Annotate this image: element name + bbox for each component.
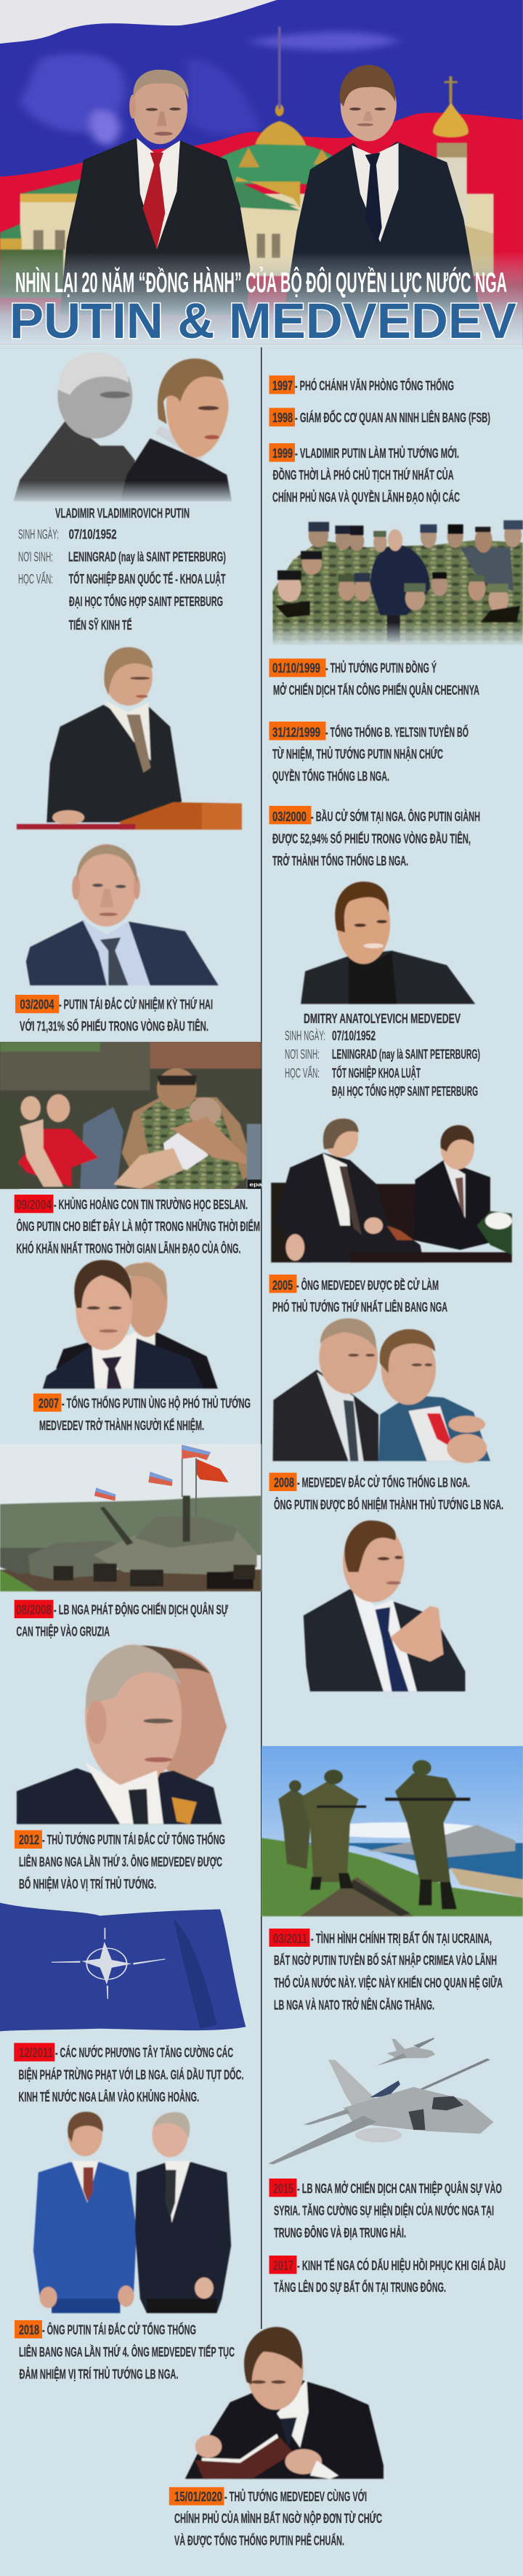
- photo: Crimea soldiers: [262, 1746, 523, 1916]
- profile: Putin: [18, 506, 226, 633]
- photo: tanks with flags: [0, 1444, 261, 1591]
- photo: Putin at podium: [17, 647, 242, 830]
- event: 2012: LIÊN BANG NGA LẦN THỨ 3. ÔNG MEDVEDEV ĐƯỢC: [19, 1854, 222, 1870]
- profile: Putin: TIẾN SỸ KINH TẾ: [69, 618, 132, 633]
- photo: Beslan hostage crisis: epa: [249, 1182, 262, 1187]
- event: 2015: [269, 2179, 502, 2240]
- Medvedev: [283, 65, 480, 315]
- photo: Medvedev reading book: [185, 2327, 384, 2479]
- profile: Medvedev: NƠI SINH:: [285, 1046, 320, 1062]
- event: 03/2000: TRỞ THÀNH TỔNG THỐNG LB NGA.: [272, 853, 408, 868]
- event: 15/01/2020: - THỦ TƯỚNG MEDVEDEV CÙNG VỚI: [224, 2489, 367, 2504]
- event: 08/2008: [15, 1600, 228, 1639]
- event: 31/12/1999: QUYỀN TỔNG THỐNG LB NGA.: [272, 769, 389, 784]
- hero image: flag, Kremlin and two leaders: [0, 0, 523, 349]
- event: 1999: [269, 443, 460, 505]
- event: 08/2008: CAN THIỆP VÀO GRUZIA: [16, 1624, 110, 1639]
- small jet: [377, 2038, 435, 2066]
- event: 31/12/1999: [269, 722, 469, 784]
- event: 2017: [269, 2256, 506, 2295]
- event: 01/10/1999: - THỦ TƯỚNG PUTIN ĐỒNG Ý: [325, 661, 437, 676]
- photo: Putin and Medvedev seated: [271, 1118, 512, 1262]
- event: 1999: 1999: [272, 445, 293, 461]
- profile: Medvedev: SINH NGÀY:: [285, 1028, 325, 1043]
- event: 2018: 2018: [19, 2322, 39, 2338]
- profile: Putin: HỌC VẤN:: [18, 571, 53, 586]
- photo: Putin with soldiers: [270, 520, 523, 647]
- event: 12/2011: BIỆN PHÁP TRỪNG PHẠT VỚI LB NGA. GIÁ DẦU TỤT DỐC.: [19, 2067, 244, 2082]
- event: 03/2004: - PUTIN TÁI ĐẮC CỬ NHIỆM KỲ THỨ HAI: [59, 996, 213, 1012]
- event: 2008: 2008: [274, 1475, 294, 1490]
- NATO flag: [0, 1903, 246, 2031]
- event: 1998: 1998: [272, 410, 293, 425]
- profile: Medvedev: HỌC VẤN:: [285, 1065, 320, 1081]
- event: 15/01/2020: 15/01/2020: [174, 2489, 222, 2504]
- event: 2007: MEDVEDEV TRỞ THÀNH NGƯỜI KẾ NHIỆM.: [39, 1418, 204, 1433]
- photo: Putin and Medvedev profile: [17, 1644, 227, 1824]
- event: 03/2011 Crimea: 03/2011: [273, 1931, 307, 1946]
- photo: Putin portrait: [26, 844, 219, 985]
- event: 09/2004: 09/2004: [16, 1197, 52, 1212]
- event: 2012: 2012: [19, 1832, 39, 1847]
- event: 2008: [269, 1473, 503, 1512]
- hero banner: [0, 0, 523, 349]
- event: 03/2004: 03/2004: [20, 996, 54, 1012]
- event: 12/2011: 12/2011: [19, 2045, 53, 2060]
- event: 03/2004: VỚI 71,31% SỐ PHIẾU TRONG VÒNG ĐẦU TIÊN.: [20, 1018, 208, 1033]
- profile: Putin: 07/10/1952: [69, 527, 117, 542]
- photo: Putin and Medvedev 2005: [273, 1318, 490, 1463]
- event: 2007: [33, 1394, 251, 1433]
- event: 2018: [15, 2320, 235, 2382]
- photo: Medvedev with hands together: [304, 1520, 465, 1692]
- profile: Medvedev: TỐT NGHIỆP KHOA LUẬT: [332, 1065, 421, 1081]
- event: 12/2011: - CÁC NƯỚC PHƯƠNG TÂY TĂNG CƯỜNG CÁC: [55, 2045, 233, 2060]
- Kremlin palace: [0, 27, 493, 298]
- event: 1997: [269, 376, 454, 394]
- event: 03/2000: [269, 806, 480, 868]
- event: 1998: [269, 408, 490, 427]
- profile: Putin: NƠI SINH:: [18, 549, 53, 564]
- timeline divider: [261, 347, 262, 2329]
- profile: Putin: SINH NGÀY:: [18, 527, 59, 542]
- event: 15/01/2020: VÀ ĐƯỢC TỔNG THỐNG PUTIN PHÊ CHUẨN.: [174, 2533, 344, 2548]
- event: 12/2011: [14, 2043, 244, 2104]
- event: 08/2008: 08/2008: [16, 1602, 52, 1618]
- event: 01/10/1999: 01/10/1999: [272, 661, 320, 676]
- event: 03/2004: [15, 995, 213, 1033]
- profile: Medvedev: 07/10/1952: [332, 1028, 376, 1043]
- event: 15/01/2020: [169, 2487, 382, 2548]
- fighter jets: [269, 2038, 493, 2165]
- name: VLADIMIR VLADIMIROVICH PUTIN: [55, 506, 190, 521]
- NATO emblem: [52, 1928, 165, 1999]
- event: 15/01/2020: CHÍNH PHỦ CỦA MÌNH BẤT NGỜ NỘP ĐƠN TỪ CHỨC: [174, 2511, 382, 2526]
- event: 2018: ĐẢM NHIỆM VỊ TRÍ THỦ TƯỚNG LB NGA.: [19, 2366, 179, 2382]
- large jet: [269, 2059, 493, 2165]
- event: 01/10/1999: [269, 658, 479, 698]
- event: 2007: - TỔNG THỐNG PUTIN ỦNG HỘ PHÓ THỦ TƯỚNG: [62, 1396, 251, 1411]
- event: 2012: BỔ NHIỆM VÀO VỊ TRÍ THỦ TƯỚNG.: [19, 1876, 156, 1891]
- photo: Beslan hostage crisis: [0, 1042, 262, 1189]
- event: 2007: 2007: [38, 1396, 59, 1411]
- hero title: PUTIN & MEDVEDEV: [9, 293, 516, 349]
- event: 2018: LIÊN BANG NGA LẦN THỨ 4. ÔNG MEDVEDEV TIẾP TỤC: [19, 2344, 235, 2359]
- photo: Medvedev and Putin standing: [33, 2112, 231, 2313]
- event: 2017: 2017: [273, 2258, 293, 2273]
- profile: Medvedev: [285, 1011, 480, 1099]
- photo: Yeltsin and Putin: [10, 352, 237, 505]
- profile: Putin: LENINGRAD (nay là SAINT PETERBURG): [68, 549, 226, 564]
- event: 09/2004: - KHỦNG HOẢNG CON TIN TRƯỜNG HỌC BESLAN.: [54, 1197, 248, 1212]
- event: 08/2008: - LB NGA PHÁT ĐỘNG CHIẾN DỊCH QUÂN SỰ: [54, 1602, 228, 1618]
- event: 31/12/1999: 31/12/1999: [272, 724, 320, 740]
- event: 09/2004: KHÓ KHĂN NHẤT TRONG THỜI GIAN LÃNH ĐẠO CỦA ÔNG.: [16, 1241, 241, 1256]
- event: 09/2004: ÔNG PUTIN CHO BIẾT ĐÂY LÀ MỘT TRONG NHỮNG THỜI ĐIỂM: [16, 1219, 260, 1234]
- event: 2015: 2015: [273, 2181, 293, 2196]
- event: 2005: [269, 1275, 447, 1315]
- event: 2015: TRUNG ĐÔNG VÀ ĐỊA TRUNG HẢI.: [274, 2225, 406, 2240]
- Putin: [60, 70, 250, 315]
- event: 2012: - THỦ TƯỚNG PUTIN TÁI ĐẮC CỬ TỔNG THỐNG: [42, 1832, 225, 1847]
- photo: Medvedev portrait: [301, 881, 475, 1004]
- event: 03/2011 Crimea: [269, 1929, 503, 2013]
- profile: Putin: TỐT NGHIỆP BAN QUỐC TẾ - KHOA LUẬT: [69, 571, 226, 586]
- event: 1997: 1997: [272, 378, 293, 393]
- profile: Putin: ĐẠI HỌC TỔNG HỢP SAINT PETERBURG: [69, 594, 223, 609]
- event: 2012: [15, 1830, 225, 1891]
- event: 2005: 2005: [272, 1277, 293, 1293]
- event: 09/2004: [15, 1195, 260, 1256]
- photo: Medvedev and Putin 2007: [43, 1260, 218, 1389]
- event: 03/2000: 03/2000: [272, 809, 307, 824]
- event: 12/2011: KINH TẾ NƯỚC NGA LÂM VÀO KHỦNG HOẢNG.: [19, 2089, 199, 2104]
- event: 2018: - ÔNG PUTIN TÁI ĐẮC CỬ TỔNG THỐNG: [42, 2322, 196, 2338]
